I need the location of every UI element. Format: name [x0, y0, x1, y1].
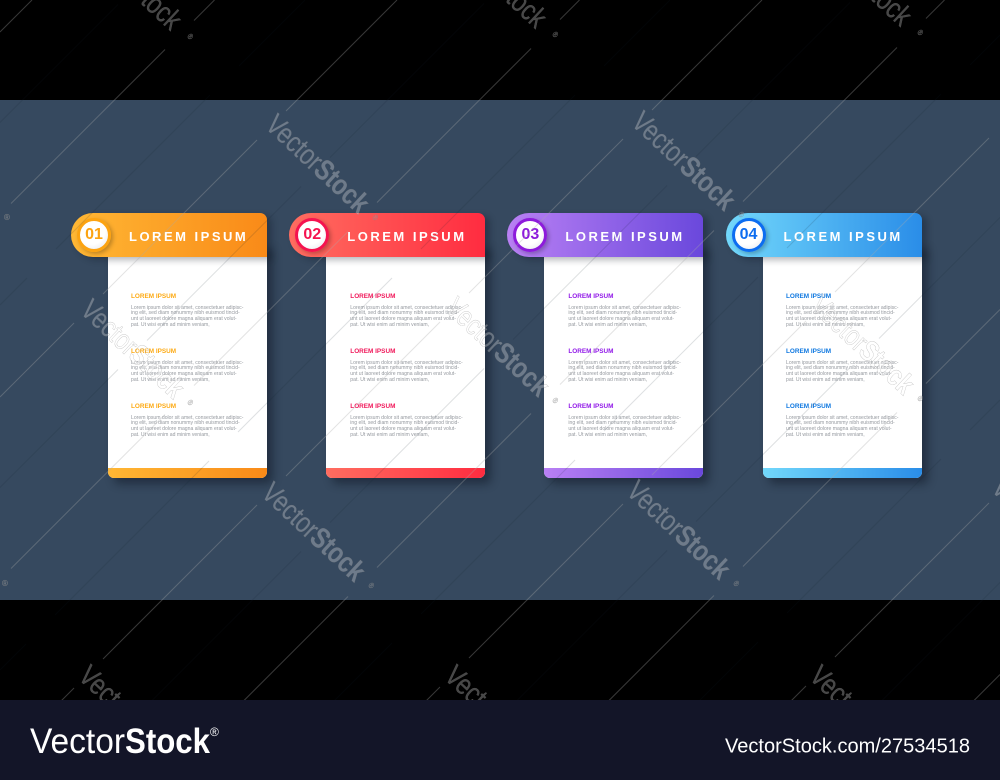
card 03 heading: LOREM IPSUM [565, 228, 685, 244]
card 02 text block 1: unt ut laoreet dolore magna aliquam erat volut- [350, 316, 456, 322]
card 01 text block 2: unt ut laoreet dolore magna aliquam erat volut- [131, 371, 237, 377]
card 03 text block 2: Lorem ipsum dolor sit amet, consectetuer adipisc- [568, 360, 681, 366]
card 03 number badge [513, 218, 547, 252]
logo wordmark: Vector [30, 722, 125, 761]
card 01 text block 2: ing elit, sed diam nonummy nibh euismod tincid- [131, 365, 240, 371]
card 04 number badge [732, 218, 766, 252]
logo wordmark: Stock [125, 722, 210, 761]
card 01 text block 1: LOREM IPSUM [131, 293, 176, 300]
card 02 text block 2: ing elit, sed diam nonummy nibh euismod tincid- [350, 365, 459, 371]
card 04 text block 1: unt ut laoreet dolore magna aliquam erat volut- [786, 316, 892, 322]
watermark overlay: VectorStock [620, 474, 738, 586]
watermark overlay: ® [4, 213, 10, 222]
card 03 text block 3: ing elit, sed diam nonummy nibh euismod tincid- [568, 420, 677, 426]
watermark overlay: ® [185, 397, 196, 408]
card 04 text block 3: LOREM IPSUM [786, 403, 831, 410]
card 03 text block 1: LOREM IPSUM [568, 293, 613, 300]
card 01 text block 2 [131, 348, 244, 383]
card 02 text block 3: Lorem ipsum dolor sit amet, consectetuer adipisc- [350, 415, 463, 421]
watermark overlay: Vect [438, 659, 495, 714]
watermark overlay: Vect [72, 659, 129, 714]
card 02 text block 3: unt ut laoreet dolore magna aliquam erat volut- [350, 426, 456, 432]
watermark overlay: ® [366, 580, 377, 591]
card 01 text block 1: pat. Ut wisi enim ad minim veniam, [131, 322, 210, 328]
card 01 header [71, 213, 267, 257]
card 01 text block 3: unt ut laoreet dolore magna aliquam erat volut- [131, 426, 237, 432]
card 03 text block 3 [568, 403, 681, 438]
card 01 white body [108, 243, 267, 478]
card 02 text block 1: ing elit, sed diam nonummy nibh euismod tincid- [350, 310, 459, 316]
panel: slate background band [0, 100, 1000, 600]
watermark overlay: ® [185, 31, 196, 42]
card 04 header [726, 213, 922, 257]
card 03 text block 1: ing elit, sed diam nonummy nibh euismod tincid- [568, 310, 677, 316]
card 04 text block 2 [786, 348, 898, 383]
card 01 number badge: 01 [85, 226, 103, 243]
image id url: VectorStock.com/27534518 [725, 734, 970, 758]
card 04 bottom gradient bar [762, 468, 922, 478]
card 03 text block 2: ing elit, sed diam nonummy nibh euismod tincid- [568, 365, 677, 371]
watermark overlay: ® [731, 578, 742, 589]
watermark overlay: VectorStock [74, 293, 192, 405]
watermark overlay: ® [915, 393, 926, 404]
card 03 text block 1: unt ut laoreet dolore magna aliquam erat volut- [568, 316, 674, 322]
card 02 text block 3 [350, 403, 463, 438]
card 04 text block 1: Lorem ipsum dolor sit amet, consectetuer adipisc- [786, 305, 898, 311]
card 02 heading: LOREM IPSUM [347, 228, 467, 244]
card 03 text block 3: Lorem ipsum dolor sit amet, consectetuer adipisc- [568, 415, 681, 421]
card 02 text block 2: pat. Ut wisi enim ad minim veniam, [350, 377, 429, 383]
card 02 text block 1: Lorem ipsum dolor sit amet, consectetuer adipisc- [350, 305, 463, 311]
panel: card 03 purple [507, 213, 713, 487]
card 02 text block 3: ing elit, sed diam nonummy nibh euismod tincid- [350, 420, 459, 426]
card 01 text block 2: LOREM IPSUM [131, 348, 176, 355]
card 03 white body [544, 243, 703, 478]
card 01 bottom gradient bar [108, 468, 267, 478]
card 03 text block 2: pat. Ut wisi enim ad minim veniam, [568, 377, 647, 383]
card 04 text block 1: LOREM IPSUM [786, 293, 831, 300]
card 01 text block 3: ing elit, sed diam nonummy nibh euismod tincid- [131, 420, 240, 426]
card 01 text block 1: Lorem ipsum dolor sit amet, consectetuer adipisc- [131, 305, 243, 311]
card 02 text block 2: Lorem ipsum dolor sit amet, consectetuer adipisc- [350, 360, 463, 366]
card 04 text block 2: pat. Ut wisi enim ad minim veniam, [786, 377, 865, 383]
panel: card 04 blue [726, 213, 932, 487]
card 01 text block 1 [131, 293, 244, 328]
watermark overlay: VectorStock [255, 476, 373, 588]
card 04 heading: LOREM IPSUM [784, 228, 903, 244]
card 01 text block 3: Lorem ipsum dolor sit amet, consectetuer adipisc- [131, 415, 243, 421]
logo wordmark: ® [210, 725, 219, 739]
card 01 text block 3: pat. Ut wisi enim ad minim veniam, [131, 432, 210, 438]
card 04 text block 2: Lorem ipsum dolor sit amet, consectetuer adipisc- [786, 360, 898, 366]
card 01 text block 3 [131, 403, 244, 438]
card 02 text block 2 [350, 348, 463, 383]
card 04 text block 3: ing elit, sed diam nonummy nibh euismod tincid- [786, 420, 895, 426]
watermark overlay: VectorStock [625, 105, 743, 217]
card 04 text block 3: Lorem ipsum dolor sit amet, consectetuer adipisc- [786, 415, 898, 421]
card 01 text block 3: LOREM IPSUM [131, 403, 176, 410]
card 04 text block 2: ing elit, sed diam nonummy nibh euismod tincid- [786, 365, 895, 371]
watermark overlay: ® [550, 29, 561, 40]
watermark overlay: ® [550, 395, 561, 406]
panel: card 02 red [289, 213, 495, 487]
card 02 number badge: 02 [303, 226, 321, 243]
watermark overlay: ® [370, 212, 381, 223]
card 03 text block 1 [568, 293, 681, 328]
watermark overlay: Vect [803, 659, 860, 714]
card 02 number badge [295, 218, 329, 252]
card 04 text block 3: pat. Ut wisi enim ad minim veniam, [786, 432, 865, 438]
card 04 text block 1 [786, 293, 898, 328]
card 04 text block 1: pat. Ut wisi enim ad minim veniam, [786, 322, 865, 328]
card 03 bottom gradient bar [544, 468, 703, 478]
card 03 text block 3: LOREM IPSUM [568, 403, 613, 410]
card 03 header [507, 213, 703, 257]
card 02 bottom gradient bar [326, 468, 485, 478]
card 01 number badge [77, 218, 111, 252]
watermark overlay: VectorStock [439, 291, 557, 403]
card 03 text block 2: unt ut laoreet dolore magna aliquam erat volut- [568, 371, 674, 377]
card 02 text block 3: LOREM IPSUM [350, 403, 395, 410]
card 02 text block 1: pat. Ut wisi enim ad minim veniam, [350, 322, 429, 328]
watermark overlay: ® [915, 27, 926, 38]
card 03 text block 1: pat. Ut wisi enim ad minim veniam, [568, 322, 647, 328]
card 02 white body [326, 243, 485, 478]
card 03 text block 2 [568, 348, 681, 383]
card 02 header [289, 213, 485, 257]
card 01 text block 1: unt ut laoreet dolore magna aliquam erat volut- [131, 316, 237, 322]
card 04 number badge: 04 [740, 226, 757, 243]
card 04 text block 2: LOREM IPSUM [786, 348, 831, 355]
watermark overlay: VectorStock [804, 289, 922, 401]
card 03 text block 1: Lorem ipsum dolor sit amet, consectetuer adipisc- [568, 305, 681, 311]
watermark overlay: ® [2, 579, 8, 588]
card 04 text block 3: unt ut laoreet dolore magna aliquam erat volut- [786, 426, 892, 432]
card 02 text block 2: unt ut laoreet dolore magna aliquam erat volut- [350, 371, 456, 377]
card 02 text block 1: LOREM IPSUM [350, 293, 395, 300]
card 04 text block 3 [786, 403, 898, 438]
watermark overlay: ® [736, 209, 747, 220]
card 03 text block 3: pat. Ut wisi enim ad minim veniam, [568, 432, 647, 438]
panel: card 01 orange [71, 213, 277, 487]
card 03 text block 2: LOREM IPSUM [568, 348, 613, 355]
card 03 text block 3: unt ut laoreet dolore magna aliquam erat volut- [568, 426, 674, 432]
logo wordmark [30, 722, 219, 761]
card 02 text block 1 [350, 293, 463, 328]
card 02 text block 2: LOREM IPSUM [350, 348, 395, 355]
card 04 text block 2: unt ut laoreet dolore magna aliquam erat volut- [786, 371, 892, 377]
card 04 text block 1: ing elit, sed diam nonummy nibh euismod tincid- [786, 310, 895, 316]
card 04 white body [762, 243, 922, 478]
card 01 text block 2: Lorem ipsum dolor sit amet, consectetuer adipisc- [131, 360, 243, 366]
watermark overlay: VectorStock [259, 108, 377, 220]
card 01 text block 1: ing elit, sed diam nonummy nibh euismod tincid- [131, 310, 240, 316]
card 01 heading: LOREM IPSUM [129, 228, 248, 244]
card 02 text block 3: pat. Ut wisi enim ad minim veniam, [350, 432, 429, 438]
card 03 number badge: 03 [521, 226, 539, 243]
card 01 text block 2: pat. Ut wisi enim ad minim veniam, [131, 377, 210, 383]
footer bar [0, 700, 1000, 780]
